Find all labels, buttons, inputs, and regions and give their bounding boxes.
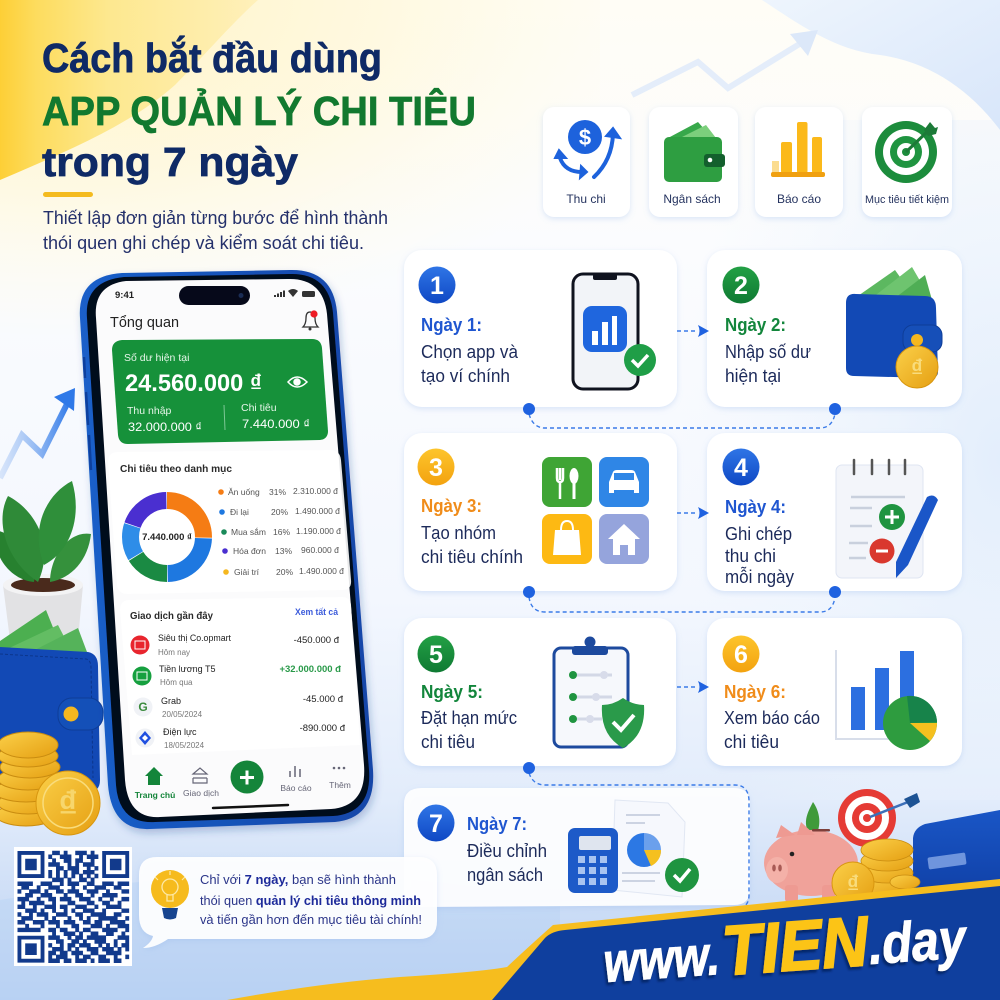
panel: recent transactions: Giao dịch gần đây [130,610,213,622]
icon tiles: categories [542,457,649,564]
balance card: Thu nhập [127,405,172,417]
dong coin [832,862,874,904]
chart legend: 960.000 đ [301,545,339,555]
large dong coin: ₫ [58,784,78,826]
nav: home: Trang chủ [135,790,175,800]
icon: bar chart with pie [836,650,937,750]
chart legend: Mua sắm [231,527,266,537]
website url: TIEN [720,902,872,990]
card: Báo cáo: Báo cáo [777,192,821,206]
transaction: electricity: 18/05/2024 [164,741,205,750]
nav: add button [230,760,264,794]
chart legend: Ăn uống [228,487,260,497]
title accent bar [43,192,93,197]
card: Thu chi: $ [579,125,591,150]
callout with lightbulb [139,857,437,948]
icon: clipboard with shield [554,636,644,748]
nav: transactions: Giao dịch [183,788,219,798]
target with arrow [838,789,920,847]
bottom navigation [135,760,351,808]
chart legend: Hóa đơn [233,546,266,556]
badge 7 [418,804,454,842]
status bar: 9:41 [115,290,135,301]
card: Ngân sách [649,107,738,217]
step 4 text [725,497,794,587]
subtitle: Thiết lập đơn giản từng bước để hình thành [43,208,388,228]
card: Mục tiêu tiết kiệm: Mục tiêu tiết kiệm [865,194,949,206]
transaction: Co.opmart: Siêu thị Co.opmart [158,633,231,643]
website url: www. [601,923,722,994]
step card 7 [404,788,750,907]
step 1 text: Ngày 1: [421,315,482,335]
step 6 text: Ngày 6: [724,682,786,702]
transaction: Grab: -45.000 đ [303,694,344,705]
step 7 text: Điều chỉnh [467,841,547,861]
step 3 text [421,496,523,567]
chart legend: 2.310.000 đ [293,486,338,496]
nav: reports: Báo cáo [280,783,312,793]
card: Thu chi: Thu chi [566,192,606,206]
transaction: Co.opmart: Hôm nay [158,648,190,657]
footer banner [227,879,1000,1000]
balance card: 24.560.000 ₫ [125,370,262,397]
chart legend: Đi lại [230,507,249,517]
step 1 text: Chọn app và [421,342,519,362]
card: Báo cáo [755,107,843,217]
step 5 text: chi tiêu [421,732,475,752]
chart legend: Giải trí [234,567,260,577]
nav: more: Thêm [329,780,351,790]
faint growth arrow top right [632,30,818,95]
badge 2 [722,266,760,304]
subtitle [43,208,388,253]
title: APP QUẢN LÝ CHI TIÊU [42,88,476,134]
panel: recent transactions: Xem tất cả [295,607,339,618]
icon: phone with app [573,274,656,389]
badge 1: 1 [430,272,444,300]
coin stack [0,732,60,826]
chart legend: 16% [273,527,290,537]
top icon cards [543,107,952,217]
transaction: salary [132,664,341,687]
panel: recent transactions [120,597,360,755]
phone body [80,270,373,829]
step 4 text: Ngày 4: [725,497,786,517]
large dong coin [36,771,100,835]
screen heading: Tổng quan [110,314,179,331]
step 3 text: Tạo nhóm [421,523,496,543]
left decoration: growth arrow [0,388,75,478]
step 4 text: Ghi chép [725,524,792,544]
step 7 text [467,814,547,885]
chart legend: 13% [275,546,292,556]
step 5 text: Đặt hạn mức [421,708,517,728]
card: Ngân sách: Ngân sách [663,192,721,206]
website url: .day [866,906,970,976]
step 6 text [724,682,820,752]
transaction: electricity [136,723,346,750]
chart legend: 1.490.000 đ [299,566,344,576]
chart legend: 31% [269,487,286,497]
balance card: Số dư hiện tại [124,352,189,364]
step card 4 [707,433,962,591]
piggy body [764,802,858,902]
transaction: Grab: G [138,700,148,714]
badge 4: 4 [734,454,748,482]
chart legend: 1.190.000 đ [296,526,341,536]
chart legend: 1.490.000 đ [295,506,340,516]
step card 5 [404,618,676,766]
transaction: electricity: -890.000 đ [300,723,346,734]
badge 1 [418,266,456,304]
step 6 text: Xem báo cáo [724,708,820,728]
nav: transactions [183,768,219,798]
badge 7: 7 [429,810,443,838]
step 1 text [421,315,519,386]
subtitle: thói quen ghi chép và kiểm soát chi tiêu. [43,233,364,253]
callout text [200,872,422,927]
transaction: salary: Hôm qua [160,678,193,687]
nav: more [329,767,351,790]
icon: lightbulb [151,870,189,920]
callout text: và tiến gần hơn đến mục tiêu tài chính! [200,912,422,927]
transaction: salary: Tiền lương T5 [159,664,215,674]
status bar [115,286,315,305]
step 2 text: Nhập số dư [725,342,811,362]
transaction: Grab [134,694,344,719]
transaction: salary: +32.000.000 đ [279,664,341,675]
badge 5: 5 [429,641,443,669]
icon: bell [303,310,318,330]
step 2 text: hiện tại [725,366,781,386]
blue card/wallet bottom right [913,810,1000,900]
icon: document, calculator and check [568,800,699,897]
callout text: thói quen quản lý chi tiêu thông minh [200,893,421,908]
step 1 text: tạo ví chính [421,366,510,386]
step 4 text: thu chi [725,546,776,566]
badge 5 [418,636,454,672]
transaction: Co.opmart: -450.000 đ [294,635,340,646]
icon: wallet with coin: ₫ [911,355,923,382]
plant in pot [0,481,91,640]
chart legend [218,486,344,577]
nav: reports [280,766,312,793]
title: trong 7 ngày [42,139,298,185]
chart legend: 20% [276,567,293,577]
wallet with cash [0,610,103,792]
piggy bank with target and coins [764,789,920,904]
step 3 text: Ngày 3: [421,496,482,516]
balance card [112,339,328,444]
coins [861,839,920,895]
step 7 text: ngân sách [467,865,543,885]
nav: home [135,767,175,800]
step card 1 [404,250,677,407]
connectors between steps [529,331,835,907]
panel: spending by category [108,450,351,594]
step card 2 [707,250,962,407]
badge 6 [722,636,760,672]
icon: wallet with coin [846,267,942,388]
step 7 text: Ngày 7: [467,814,527,834]
step 6 text: chi tiêu [724,732,779,752]
website url [601,902,970,994]
balance card: 32.000.000 ₫ [128,420,202,434]
panel: spending by category: 7.440.000 ₫ [142,532,192,543]
badge 6: 6 [734,641,748,669]
balance card: Chi tiêu [241,402,277,414]
badge 2: 2 [734,272,748,300]
phone [80,270,373,829]
step card 6 [707,618,962,766]
dong coin: ₫ [847,871,859,898]
chart legend: 20% [271,507,288,517]
card: Mục tiêu tiết kiệm [862,107,952,217]
transaction: electricity: Điện lực [163,727,197,737]
step card 3 [404,433,677,591]
callout text: Chỉ với 7 ngày, bạn sẽ hình thành [200,872,396,887]
step 5 text: Ngày 5: [421,682,483,702]
transaction: Grab: 20/05/2024 [162,710,203,719]
card: Thu chi [543,107,630,217]
transaction: Grab: Grab [161,696,181,706]
donut chart [130,500,204,574]
transaction: Co.opmart [130,633,340,657]
step 2 text: Ngày 2: [725,315,786,335]
step 4 text: mỗi ngày [725,566,794,587]
title: Cách bắt đầu dùng [42,35,382,81]
badge 4 [722,448,760,486]
step 5 text [421,682,517,752]
balance card: 7.440.000 ₫ [242,417,310,431]
step 2 text [725,315,811,386]
badge 3: 3 [429,454,443,482]
panel: spending by category: Chi tiêu theo danh mục [120,463,232,475]
QR code [14,847,132,966]
step 3 text: chi tiêu chính [421,547,523,567]
badge 3 [418,448,454,486]
icon: notepad and pen [836,460,938,578]
connector dots and arrowheads [523,325,841,774]
title [42,35,476,185]
